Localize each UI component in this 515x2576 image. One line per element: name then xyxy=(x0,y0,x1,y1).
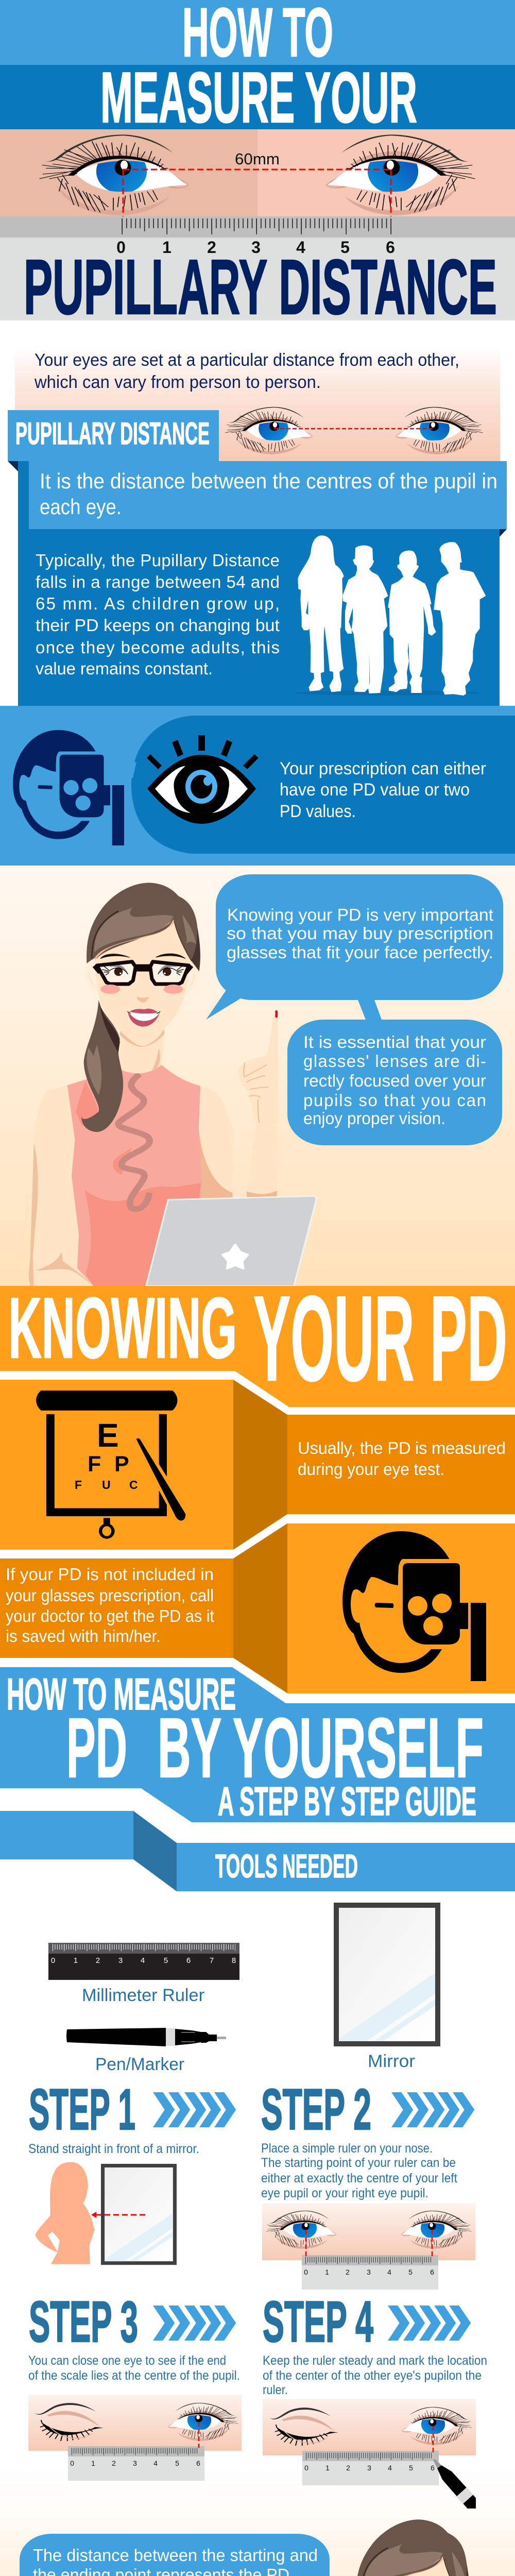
text box: usually measured: during your eye test. xyxy=(298,1460,444,1479)
illustration: woman xyxy=(29,883,316,1286)
header panel xyxy=(0,0,515,138)
bubble: essential lenses: rectly focused over your xyxy=(303,1071,486,1090)
typical PD text xyxy=(36,551,280,678)
icon: right eye xyxy=(326,134,475,215)
bubble: essential lenses xyxy=(287,1020,502,1145)
bubble: essential lenses: It is essential that your xyxy=(303,1032,486,1052)
tool: ruler: 1 xyxy=(74,1956,78,1965)
step 4 text: of the center of the other eye's pupilon the xyxy=(263,2368,482,2383)
step 2 text: The starting point of your ruler can be xyxy=(261,2156,456,2170)
panel: prescription values xyxy=(0,706,515,866)
illustration: closed eye with ruler: 0 xyxy=(70,2459,74,2467)
prescription text xyxy=(280,759,486,821)
heading: PD by yourself: PD xyxy=(66,1701,127,1795)
heading label: PUPILLARY DISTANCE xyxy=(15,416,210,451)
step 1: STEP 1 xyxy=(29,2077,135,2142)
panel: woman with speech bubbles xyxy=(0,866,515,1286)
chart letters: C xyxy=(129,1478,138,1492)
text box: call your doctor: your glasses prescription, call xyxy=(6,1586,214,1605)
illustration: eyes with ruler: 6 xyxy=(430,2268,434,2276)
tool: ruler: 7 xyxy=(210,1956,214,1965)
step 1 xyxy=(28,2077,236,2265)
tool: ruler: 3 xyxy=(118,1956,123,1965)
illustration: eyes with ruler: 0 xyxy=(304,2268,308,2276)
chart letters: F xyxy=(88,1452,101,1477)
text box: call your doctor: is saved with him/her. xyxy=(6,1626,161,1646)
chart letters: U xyxy=(102,1478,111,1492)
intro text: Your eyes are set at a particular distance from each other, xyxy=(35,350,459,370)
step 1 text: Stand straight in front of a mirror. xyxy=(28,2142,199,2156)
step 4 xyxy=(263,2300,487,2509)
text box: call your doctor xyxy=(0,1558,233,1658)
bubble: knowing your PD: so that you may buy prescription xyxy=(227,924,493,943)
illustration: closed eye with ruler: 2 xyxy=(112,2459,116,2467)
woman second illustration xyxy=(298,2519,515,2576)
step 3 xyxy=(28,2290,242,2481)
chart letters xyxy=(75,1417,138,1492)
illustration: eyes with ruler: 1 xyxy=(325,2268,329,2276)
prescription text: PD values. xyxy=(280,802,356,821)
illustration: marking ruler: 4 xyxy=(388,2464,392,2472)
arrows xyxy=(391,2092,474,2127)
icon: pen marking xyxy=(433,2459,476,2509)
illustration: eyes with ruler: 4 xyxy=(387,2268,391,2276)
illustration: closed eye with ruler: 6 xyxy=(196,2459,200,2467)
illustration: eyes with ruler: 2 xyxy=(346,2268,350,2276)
fold xyxy=(233,1380,287,1550)
panel: eyes with distance xyxy=(0,129,515,216)
tool: ruler: 8 xyxy=(232,1956,236,1965)
step 3 text xyxy=(28,2353,240,2383)
illustration: closed eye with ruler: 1 xyxy=(91,2459,95,2467)
bubble: distance represents PD xyxy=(20,2534,330,2576)
illustration: marking ruler: 1 xyxy=(325,2464,330,2472)
ruler numbers: 5 xyxy=(340,238,350,257)
icon: small eyes xyxy=(225,407,483,454)
banner: tools needed: TOOLS NEEDED xyxy=(215,1848,358,1885)
illustration: marking ruler xyxy=(263,2399,476,2509)
ruler numbers: 1 xyxy=(162,238,171,257)
step 4 text xyxy=(263,2353,487,2397)
heading label xyxy=(8,410,219,461)
illustration: eyes with ruler: 3 xyxy=(367,2268,371,2276)
text box: call your doctor: If your PD is not included in xyxy=(6,1565,214,1584)
typical PD text: once they become adults, this xyxy=(36,638,280,657)
chart letters: P xyxy=(114,1452,129,1477)
icon: eye xyxy=(147,735,259,824)
bubble: knowing your PD: Knowing your PD is very important xyxy=(227,905,493,924)
step 3: STEP 3 xyxy=(29,2290,138,2354)
chart letters: E xyxy=(97,1417,119,1454)
definition text xyxy=(40,469,497,519)
bubble: essential lenses: enjoy proper vision. xyxy=(303,1109,445,1128)
icon: children silhouettes xyxy=(294,535,486,696)
illustration: eyes with ruler xyxy=(262,2204,475,2290)
typical PD text: their PD keeps on changing but xyxy=(36,616,280,635)
chart letters: F xyxy=(75,1478,82,1492)
step 4 text: ruler. xyxy=(263,2383,288,2397)
section background xyxy=(0,2463,515,2576)
panel: ruler xyxy=(0,216,515,330)
label: pen marker: Pen/Marker xyxy=(95,2055,184,2074)
typical PD text: value remains constant. xyxy=(36,659,213,678)
heading: how to measure: HOW TO MEASURE xyxy=(7,1670,236,1719)
ruler numbers: 6 xyxy=(386,238,395,257)
tool: ruler xyxy=(48,1943,239,1980)
step 2 text: either at exactly the centre of your left xyxy=(261,2171,457,2185)
panel: how to measure heading xyxy=(0,1658,515,1824)
step 2 text: eye pupil or your right eye pupil. xyxy=(261,2186,428,2200)
illustration: marking ruler: 2 xyxy=(346,2464,350,2472)
intro text xyxy=(34,350,459,392)
step 4 text: Keep the ruler steady and mark the location xyxy=(263,2353,487,2368)
icon: doctor with phoropter xyxy=(342,1531,486,1681)
ruler numbers: 2 xyxy=(207,238,216,257)
bubble: distance represents PD: The distance between the starting and xyxy=(33,2546,318,2565)
icon: woman silhouette and mirror xyxy=(35,2162,177,2265)
bubble: knowing your PD xyxy=(206,874,503,1020)
icon: eye chart xyxy=(36,1391,185,1537)
panel: intro xyxy=(8,347,500,461)
measurement dashes xyxy=(123,170,391,216)
illustration: closed eye with ruler: 3 xyxy=(133,2459,137,2467)
fold xyxy=(233,1523,287,1693)
text box: call your doctor: your doctor to get the PD as it xyxy=(6,1606,214,1625)
text box: usually measured: Usually, the PD is measured xyxy=(298,1438,506,1458)
step 3 text: of the scale lies at the centre of the pupil. xyxy=(28,2368,240,2383)
tool: ruler: 0 xyxy=(51,1956,55,1965)
banner: tools needed xyxy=(0,1811,515,1891)
tool: mirror xyxy=(334,1903,440,2046)
tool: ruler: 2 xyxy=(96,1956,100,1965)
typical PD text: falls in a range between 54 and xyxy=(36,572,280,591)
step 3 text: You can close one eye to see if the end xyxy=(28,2353,226,2368)
step 2 text: Place a simple ruler on your nose. xyxy=(261,2141,433,2156)
ruler numbers xyxy=(116,238,395,257)
arrows xyxy=(388,2306,471,2341)
label: 60mm: 60mm xyxy=(235,150,280,168)
bubble: knowing your PD: glasses that fit your face perfectly. xyxy=(227,943,493,962)
typical PD text: 65 mm. As children grow up, xyxy=(36,594,280,613)
tool: ruler: 5 xyxy=(164,1956,168,1965)
panel: knowing your PD xyxy=(0,1270,515,1693)
tool: pen xyxy=(66,2028,226,2046)
illustration: closed eye with ruler: 5 xyxy=(175,2459,179,2467)
definition text: each eye. xyxy=(40,495,122,519)
panel: definition xyxy=(8,461,507,706)
prescription text: have one PD value or two xyxy=(280,780,470,800)
illustration: marking ruler: 3 xyxy=(367,2464,371,2472)
illustration: closed eye with ruler: 4 xyxy=(153,2459,158,2467)
tool: ruler: 6 xyxy=(186,1956,191,1965)
tool: ruler: 4 xyxy=(141,1956,145,1965)
speech shape xyxy=(131,716,515,854)
typical PD text: Typically, the Pupillary Distance xyxy=(36,551,280,570)
label: mirror: Mirror xyxy=(368,2052,415,2071)
label: millimeter ruler: Millimeter Ruler xyxy=(82,1986,204,2005)
step 4: STEP 4 xyxy=(263,2290,373,2354)
step 2: STEP 2 xyxy=(261,2077,371,2142)
illustration: marking ruler: 0 xyxy=(304,2464,308,2472)
step 2 xyxy=(261,2077,475,2290)
ruler numbers: 0 xyxy=(116,238,126,257)
illustration: eyes with ruler: 5 xyxy=(408,2268,413,2276)
icon: left eye xyxy=(40,134,188,215)
arrows xyxy=(153,2306,236,2341)
step 2 text xyxy=(261,2141,457,2200)
arrows xyxy=(153,2092,236,2127)
ruler numbers: 4 xyxy=(296,238,305,257)
illustration: marking ruler: 6 xyxy=(431,2464,435,2472)
icon: doctor with phoropter xyxy=(13,730,124,845)
illustration: marking ruler: 5 xyxy=(409,2464,413,2472)
text box: usually measured xyxy=(287,1415,515,1514)
intro text: which can vary from person to person. xyxy=(34,372,321,392)
bubble: essential lenses: pupils so that you can xyxy=(303,1091,486,1110)
bubble: essential lenses: glasses' lenses are di- xyxy=(303,1052,486,1071)
heading: knowing: KNOWING xyxy=(8,1280,237,1376)
illustration: closed eye with ruler xyxy=(28,2395,242,2481)
prescription text: Your prescription can either xyxy=(280,759,486,778)
ruler numbers: 3 xyxy=(251,238,261,257)
